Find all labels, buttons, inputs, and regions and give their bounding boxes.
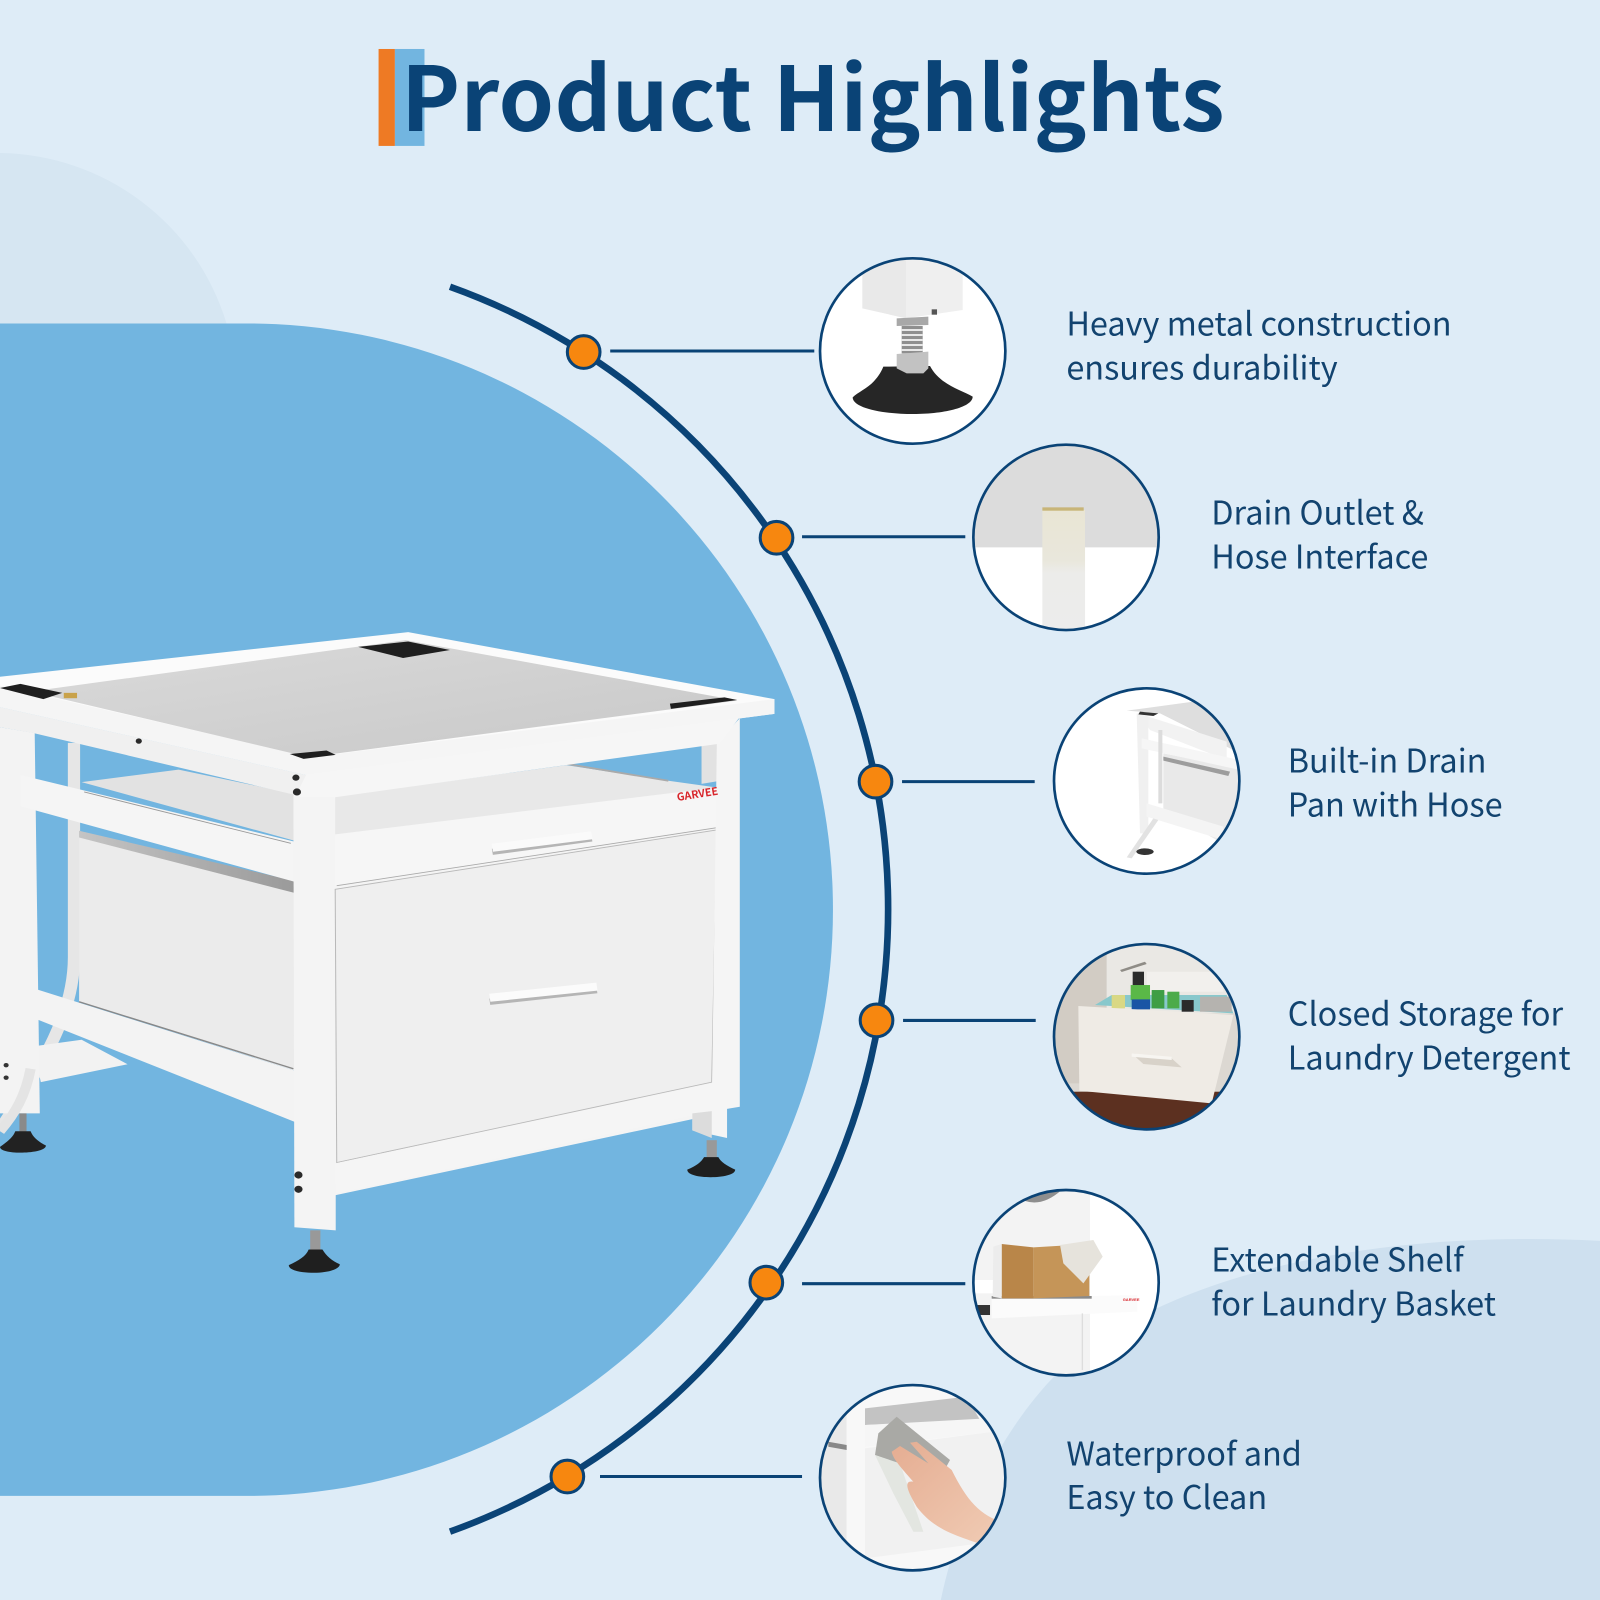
connector [902,780,1035,783]
feature text: Laundry Detergent [1288,1032,1571,1079]
photo circle: open drawer with detergent [1053,943,1240,1135]
feature row 1: heavy metal construction [567,253,1452,444]
photo circle: drain pipe [970,440,1163,637]
curved timeline arc [450,287,888,1532]
feature row 6: waterproof [551,1383,1302,1573]
feature text: Built-in Drain [1288,735,1486,782]
product illustration: drawer cabinet stand [0,632,774,1273]
title accent: orange bar [379,49,395,146]
decorative bottom-right shape [941,1239,1600,1600]
feature text: Drain Outlet & [1211,487,1424,534]
photo circle: side view of cabinet [1054,688,1240,874]
feature text: Waterproof and [1066,1428,1302,1475]
feature text: ensures durability [1066,343,1338,390]
photo circle: shelf with laundry basket: GARVEE [1123,1297,1140,1302]
feature text: Closed Storage for [1288,989,1564,1036]
connector [600,1475,802,1478]
feature row 4: closed storage [860,943,1571,1135]
connector [802,1282,965,1285]
title accent: blue bar [395,49,424,146]
decorative top-left circle [0,153,227,323]
feature row 5: extendable shelf [750,1187,1496,1380]
feature text: Easy to Clean [1066,1472,1267,1519]
marker dot [567,336,600,368]
feature row 2: drain outlet [760,440,1428,637]
connector [802,535,965,538]
marker dot [750,1266,783,1299]
feature text: Heavy metal construction [1066,299,1452,346]
marker dot [551,1460,584,1493]
photo circle: hand wiping cabinet [820,1383,1007,1573]
photo circle: adjustable foot [820,253,1005,444]
title [379,28,1225,157]
feature text: Extendable Shelf [1211,1234,1465,1281]
photo circle: shelf with laundry basket [970,1187,1159,1380]
logo text: GARVEE [676,784,719,805]
marker dot [760,521,793,554]
blue backdrop panel [0,323,833,1496]
feature text: Pan with Hose [1288,779,1503,826]
feature text: Hose Interface [1211,531,1428,578]
connector [903,1019,1036,1022]
marker dot [860,1004,893,1037]
marker dot [859,765,892,798]
feature row 3: built-in drain pan [859,688,1503,874]
connector [610,350,814,353]
title text: Product Highlights [401,28,1225,157]
black corner pads [0,642,737,759]
feature text: for Laundry Basket [1211,1278,1496,1325]
